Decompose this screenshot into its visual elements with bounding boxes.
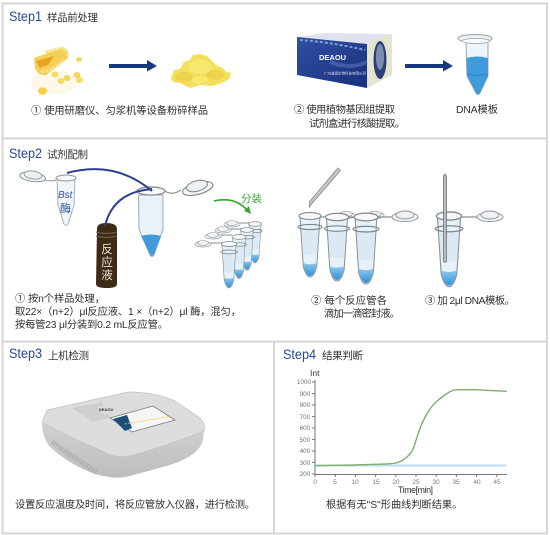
x axis ticks: 35 — [452, 479, 460, 486]
y axis ticks: 600 — [300, 425, 311, 432]
heading: step 2: Step2 — [9, 145, 42, 161]
text: step 1 instruction 2: 试剂盒进行核酸提取。 — [309, 117, 405, 130]
text: step 2 instruction 2: ② 每个反应管各 — [311, 294, 387, 307]
y axis ticks — [297, 379, 315, 478]
panel: step 1 — [2, 4, 547, 138]
heading: step 3: Step3 — [9, 345, 42, 361]
y axis ticks: 200 — [300, 471, 311, 478]
icon: three tubes — [298, 211, 418, 284]
icon: kit box: DEAOU — [319, 53, 346, 62]
panel: step 3 — [2, 342, 274, 534]
label: DNA template: DNA模板 — [456, 103, 498, 116]
icon: kit box: 广州迪澳生物科技有限公司 — [324, 70, 366, 76]
heading: step 4 — [283, 346, 364, 362]
icon: reaction liquid bottle: 液 — [101, 268, 113, 282]
text: step 2 instruction 1 — [15, 292, 241, 331]
x axis ticks: 10 — [351, 479, 359, 486]
icon: mixing tube — [137, 177, 214, 256]
arrow: enzyme to mixing tube — [67, 169, 152, 191]
text: step 3 instruction: 设置反应温度及时间，将反应管放入仪器，进行检测。 — [15, 498, 255, 511]
x axis ticks: 0 — [313, 479, 317, 486]
x axis title: Time[min] — [398, 485, 433, 495]
heading: step 3 — [9, 345, 89, 362]
heading: step 2 — [9, 145, 88, 161]
arrow: corn to powder — [109, 60, 157, 72]
y axis ticks: 1000 — [297, 379, 312, 386]
text: step 1 instruction 1: ① 使用研磨仪、匀浆机等设备粉碎样品 — [31, 104, 208, 117]
text: step 1 instruction 2: ② 使用植物基因组提取 — [294, 103, 395, 116]
text: step 2 instruction 3: ③ 加 2μl DNA模板。 — [425, 294, 515, 307]
panel: step 4 — [274, 342, 547, 534]
y axis ticks: 900 — [300, 391, 311, 398]
heading: step 4: 结果判断 — [322, 349, 364, 362]
text: step 2 instruction 1: 按每管23 μl分装到0.2 mL反应管。 — [15, 318, 168, 331]
icon: Bst enzyme tube — [19, 169, 76, 226]
icon: DNA template tube — [458, 34, 492, 94]
icon: detection instrument: DEAOU — [99, 407, 114, 412]
icon: reaction liquid bottle — [96, 223, 117, 288]
x axis ticks — [313, 474, 507, 486]
heading: step 4: Step4 — [283, 346, 316, 362]
text: step 1 instruction 2 — [294, 103, 405, 130]
heading: step 1: 样品前处理 — [47, 11, 98, 24]
y axis ticks: 700 — [300, 414, 311, 421]
y axis ticks: 300 — [300, 460, 311, 467]
text: step 2 instruction 1: 取22×（n+2）μl反应液、1 ×（n+2）μl 酶，混匀， — [15, 305, 241, 318]
text: step 2 instruction 2 — [311, 294, 400, 320]
negative curve — [315, 464, 506, 466]
x axis ticks: 40 — [473, 479, 481, 486]
icon: Bst enzyme tube: Bst — [58, 190, 74, 201]
x axis ticks: 15 — [372, 479, 380, 486]
icon: kit box — [297, 33, 392, 88]
arrow: dispensing — [214, 200, 251, 214]
y axis ticks: 800 — [300, 402, 311, 409]
label: dispensing: 分装 — [241, 192, 262, 205]
icon: pipette dropping — [310, 168, 340, 207]
icon: detection instrument — [42, 392, 204, 478]
panel: step 2 — [2, 138, 547, 342]
y axis title: Int — [310, 368, 320, 378]
x axis ticks: 30 — [432, 479, 440, 486]
y axis ticks: 500 — [300, 437, 311, 444]
line chart — [297, 368, 507, 495]
heading: step 1 — [9, 8, 98, 24]
x axis ticks: 45 — [493, 479, 501, 486]
arrow: liquid to mixing tube — [105, 189, 152, 226]
text: step 2 instruction 1: ① 按n个样品处理， — [15, 292, 105, 305]
positive S curve — [315, 390, 507, 466]
x axis ticks: 25 — [412, 479, 420, 486]
icon: reaction liquid bottle: 应 — [101, 255, 113, 269]
icon: tube with pipette — [435, 174, 503, 287]
y axis ticks: 400 — [300, 448, 311, 455]
heading: step 3: 上机检测 — [48, 349, 89, 362]
x axis ticks: 20 — [392, 479, 400, 486]
heading: step 2: 试剂配制 — [47, 148, 88, 161]
icon: dispensed tube row — [195, 221, 262, 288]
arrow: kit to template — [405, 60, 453, 72]
text: step 2 instruction 2: 滴加一滴密封液。 — [324, 307, 400, 320]
x axis ticks: 5 — [333, 479, 337, 486]
icon: corn — [31, 48, 83, 95]
icon: Bst enzyme tube: 酶 — [60, 202, 71, 215]
text: step 4 instruction: 根据有无"S"形曲线判断结果。 — [326, 498, 462, 511]
heading: step 1: Step1 — [9, 8, 42, 24]
icon: yellow powder — [171, 54, 231, 88]
icon: reaction liquid bottle: 反 — [101, 243, 113, 256]
